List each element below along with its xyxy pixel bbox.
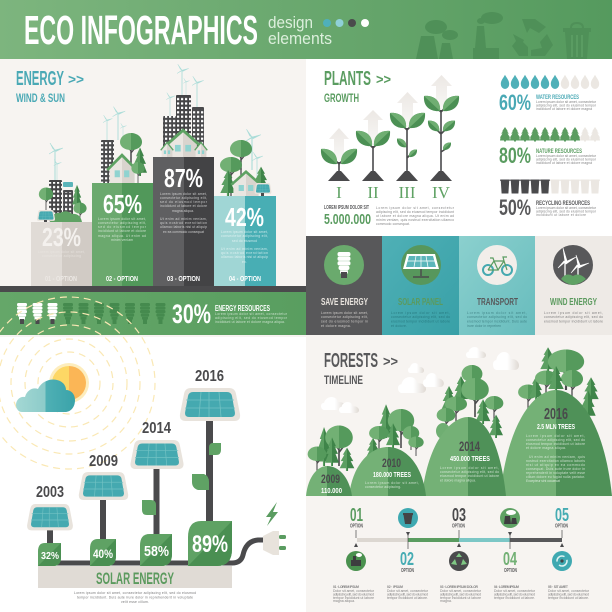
chart: forest trees 2014	[436, 365, 503, 439]
stage numerals: III	[399, 183, 416, 202]
stat: 5.000.000: 5.000.000	[324, 211, 371, 228]
bar: 02 option: 02 - OPTION	[106, 274, 138, 283]
stat: water resources 60%: 60%	[499, 90, 531, 115]
option 05: 05	[555, 505, 569, 525]
leaf: 58%	[140, 534, 172, 566]
hill: 2010: Lorem ipsum dolor sit amet,	[365, 481, 419, 485]
chart: solar energy growth	[27, 368, 286, 604]
hill: 2010: consectetur adipiscing.	[365, 485, 401, 489]
panel: save energy tile: sed do eiusmod tempor in	[321, 320, 368, 324]
hill: 2016: reprehenderit in voluptate velit esse	[526, 471, 585, 475]
text: solar caption: Lorem ipsum dolor sit amet, consectetur adipiscing elit, sed do eiusmod	[74, 591, 196, 595]
icon: cloud	[16, 379, 75, 412]
solar panels	[27, 388, 240, 530]
text: timeline descriptions: adipiscing elit, sed do eiusmod	[440, 592, 481, 596]
stat: 5.000.000: Lorem ipsum dolor sit amet, consectetur	[376, 206, 455, 210]
text: solar caption	[74, 591, 196, 604]
leaf: 32%	[38, 543, 61, 566]
text: energy resources: ENERGY RESOURCES	[215, 304, 270, 313]
stat: water resources 60%: WATER RESOURCES	[536, 95, 579, 101]
leaves	[321, 96, 459, 164]
icon: factory	[473, 12, 503, 59]
stage numerals: IV	[432, 183, 451, 202]
text: solar caption: velit esse cillum.	[121, 600, 149, 604]
option 03	[449, 505, 469, 571]
panel: energy background	[0, 59, 306, 337]
stat: 5.000.000: adipiscing elit, sed do eiusmod tempor incididunt	[376, 210, 454, 214]
icon: trash bin	[563, 23, 591, 59]
option 01: OPTION	[350, 524, 363, 530]
hill: 2010: 2010	[382, 456, 401, 470]
hill: 2014: 450.000 TREES	[450, 454, 490, 463]
hill: 2010: 180.000 TREES	[373, 472, 411, 479]
hill: 2009	[306, 466, 352, 496]
chart: forest trees 2009	[308, 426, 354, 472]
stat: 5.000.000: ut labore et dolore magna aliqua. Ut enim ad	[376, 214, 454, 218]
bar: 04 option: 04 - OPTION	[229, 274, 261, 283]
option 04: 04	[503, 549, 517, 569]
text: timeline descriptions: 04 · LOREM IPSUM	[494, 585, 519, 589]
leaf: 89%	[188, 521, 232, 566]
bar: 02 option: consectetur adipiscing elit,	[98, 221, 146, 225]
year labels: 2014	[142, 420, 171, 437]
bar: 04 option: 42%	[225, 202, 264, 232]
text: timeline descriptions: adipiscing elit, sed do eiusmod	[494, 592, 535, 596]
panel: save energy tile: consectetur adipiscing elit,	[321, 315, 368, 319]
bar: 02 option: minim veniam	[111, 238, 133, 242]
chart: forest trees 2010	[366, 404, 424, 460]
icon row: light bulbs	[17, 303, 166, 324]
subtitle: design	[268, 13, 313, 32]
cable	[40, 540, 266, 563]
panel: transport tile	[459, 236, 535, 335]
hill: 2016	[500, 390, 612, 496]
base label: solar energy	[38, 566, 232, 588]
stat: nature resources 80%	[499, 127, 600, 168]
option 01	[346, 505, 366, 571]
text: energy resources	[215, 304, 288, 324]
text: timeline descriptions: tempor incididunt ut labore.	[494, 596, 535, 600]
bar: 03 option: quis nostrud exercitation	[160, 221, 207, 225]
bar: 01 option: consectetur adipiscing	[42, 254, 81, 258]
text: energy resources: incididunt ut labore et dolore magna aliqua.	[215, 320, 285, 324]
option 04	[500, 508, 520, 574]
stat: 5.000.000: commodo consequat.	[376, 222, 410, 226]
panel: save energy tile: SAVE ENERGY	[321, 297, 368, 308]
panel: transport tile: TRANSPORT	[477, 297, 518, 308]
leaf: 40%: 40%	[93, 547, 113, 561]
year labels: 2003	[36, 484, 64, 501]
stat: 5.000.000	[324, 205, 455, 228]
bar: 04 option: Lorem ipsum dolor sit amet,	[221, 230, 268, 234]
panel: wind energy tile: eiusmod tempor incididunt ut labore	[544, 320, 603, 324]
colour dots	[323, 19, 369, 27]
bar: 02 option: sed do eiusmod tempor	[98, 225, 147, 229]
text: energy resources: Lorem ipsum dolor sit amet, consectetur	[215, 312, 288, 316]
solar stems	[47, 420, 213, 547]
panel: transport tile: consectetur adipiscing elit, sed do	[467, 315, 527, 319]
stage numerals	[336, 183, 451, 202]
bar: 04 option: sed do eiusmod	[232, 239, 257, 243]
header banner	[0, 0, 612, 59]
panel: transport tile: irure dolor in reprehen	[467, 324, 501, 328]
hill: 2016: Ut enim ad minim veniam, quis	[529, 455, 585, 459]
panel: solar panel tile: eiusmod tempor incididunt ut labore	[391, 320, 450, 324]
bar: 03 option: Ut enim ad minim veniam,	[160, 217, 207, 221]
chart: option timeline	[346, 505, 572, 574]
hill: 2016: eiusmod tempor incididunt ut labore	[526, 442, 585, 446]
text: timeline descriptions: 05 · SIT AMET	[548, 585, 569, 589]
stat: 30%: 30%	[172, 299, 211, 329]
panel: solar panel tile	[382, 236, 459, 335]
bar: 04 option: consectetur adipiscing elit,	[221, 234, 268, 238]
chart: plant growth stages	[321, 75, 459, 202]
panel: transport tile: eiusmod tempor incididunt. Duis aute	[467, 320, 527, 324]
panel: plants heading: GROWTH	[324, 91, 359, 105]
bar: 04 option: Ut enim ad minim veniam,	[221, 247, 268, 251]
subtitle	[268, 13, 332, 48]
panel: forests heading: FORESTS	[324, 350, 378, 372]
stat: water resources 60%: adipiscing elit, sed do eiusmod tempor	[536, 104, 597, 108]
hill: 2016: 2.5 MLN TREES	[537, 422, 575, 431]
option 03: OPTION	[452, 524, 465, 530]
panel: energy heading: WIND & SUN	[16, 91, 65, 105]
text: timeline descriptions: 03 · LOREM IPSUM DOLOR	[440, 585, 479, 589]
illustration: city on bar 2	[101, 107, 147, 183]
bar: 03 option: ullamco laboris nisi ut aliquip	[160, 225, 207, 229]
timeline bar	[357, 538, 562, 542]
text: timeline descriptions: Dolor sit amet, consectetur	[387, 589, 429, 593]
option 01: 01	[350, 505, 363, 525]
hill: 2016: et dolore magna aliqua.	[526, 446, 566, 450]
stage numerals: II	[367, 183, 379, 202]
hill: 2014: eiusmod tempor incididunt ut labore	[440, 474, 499, 478]
panel: solar panel tile: et dolore.	[391, 324, 407, 328]
stat: recycling resources 50%	[499, 180, 600, 220]
bar: 04 option: quis nostrud exercitation	[221, 251, 268, 255]
bar: 02 option: magna aliqua. Ut enim ad	[98, 234, 146, 238]
icon: cooling towers	[416, 20, 458, 59]
panel: energy heading: >>	[68, 71, 84, 87]
text: timeline descriptions: magna.	[440, 599, 452, 603]
text: timeline descriptions: adipiscing elit, sed do eiusmod	[333, 592, 374, 596]
bar: 03 option: magna aliqua.	[172, 209, 194, 213]
panel: plants heading	[324, 68, 391, 105]
stat: 5.000.000: LOREM IPSUM DOLOR SIT	[324, 205, 369, 211]
hill: 2009: 110.000	[321, 486, 342, 495]
text: timeline descriptions: tempor incididunt ut labore.	[548, 596, 589, 600]
hill: 2014	[422, 417, 506, 496]
bar: 02 option: incididunt ut labore et dolore	[98, 229, 146, 233]
baseline bar	[0, 286, 306, 292]
panel: save energy tile: et dolore magna.	[321, 324, 351, 328]
text: timeline descriptions: Dolor sit amet, consectetur	[440, 589, 482, 593]
option 05	[552, 505, 572, 571]
hill: 2016: nisi ut aliquip ex ea commodo	[526, 463, 585, 467]
panel: plants heading: >>	[376, 71, 391, 87]
stat: 5.000.000: minim veniam, quis nostrud exercitation ullamco	[376, 218, 454, 222]
stat: recycling resources 50%: 50%	[499, 195, 531, 220]
panel: transport tile: Lorem ipsum dolor sit amet,	[467, 311, 527, 315]
option 04: OPTION	[504, 568, 517, 574]
panel: save energy tile	[306, 236, 382, 335]
illustration: sun rays rings	[0, 297, 155, 469]
text: energy resources: adipiscing elit, sed do eiusmod tempor	[215, 316, 288, 320]
text: timeline descriptions: Dolor sit amet, consectetur	[333, 589, 375, 593]
hill: 2014: 2014	[459, 438, 480, 454]
stat: nature resources 80%: 80%	[499, 143, 531, 168]
text: timeline descriptions: Dolor sit amet, consectetur	[548, 589, 590, 593]
text: timeline descriptions: Dolor sit amet, consectetur	[494, 589, 536, 593]
stat: water resources 60%	[499, 75, 599, 115]
text: timeline descriptions: tempor incididunt ut labore	[440, 596, 481, 600]
bar: 02 option	[92, 183, 153, 286]
option 02: 02	[400, 549, 414, 569]
bar: 03 option	[153, 157, 214, 286]
panel: forests heading: >>	[383, 353, 398, 369]
bar: 04 option	[214, 196, 276, 286]
stems	[335, 108, 447, 172]
bar: 01 option: 01 - OPTION	[45, 274, 77, 283]
subtitle: elements	[268, 29, 332, 48]
panel: solar panel tile: consectetur adipiscing elit, sed do	[391, 315, 450, 319]
stat: water resources 60%: incididunt ut labore et dolore magna	[536, 107, 592, 111]
icon: sun	[49, 363, 89, 403]
panel: solar panel tile: SOLAR PANEL	[398, 297, 443, 308]
pot bases	[328, 171, 452, 181]
panel: forests heading: TIMELINE	[324, 373, 363, 387]
panel: solar background	[0, 337, 306, 612]
hill: 2016: 2016	[544, 406, 568, 423]
clouds	[321, 347, 519, 413]
text: solar caption: tempor incididunt. Duis aute irure dolor in reprehenderit in voluptate	[77, 596, 193, 600]
option 05: OPTION	[555, 524, 568, 530]
icon: plug	[263, 531, 286, 555]
stat: nature resources 80%: NATURE RESOURCES	[536, 149, 582, 155]
bar: 03 option: 87%	[164, 163, 203, 193]
stat: water resources 60%: Lorem ipsum dolor sit amet, consectetur	[536, 100, 597, 104]
stat: recycling resources 50%: RECYCLING RESOURCES	[536, 201, 590, 207]
hill: 2016: cillum dolore eu fugiat nulla pariatur.	[526, 475, 585, 479]
panel: plants heading: PLANTS	[324, 68, 371, 90]
leaf: 89%: 89%	[192, 531, 228, 558]
illustration: city on bar 4	[220, 129, 271, 196]
panel: save energy tile: Lorem ipsum dolor sit amet,	[321, 311, 368, 315]
panel: wind energy tile: Lorem ipsum dolor sit amet,	[544, 311, 603, 315]
chart: forest trees 2016	[518, 347, 599, 419]
leaf: 40%	[90, 539, 116, 566]
growth arrows	[329, 75, 452, 162]
hill: 2010	[349, 447, 426, 496]
option 02: OPTION	[401, 568, 414, 574]
bar: 01 option: 23%	[42, 222, 81, 252]
bar: 01 option	[31, 222, 92, 286]
text: timeline descriptions: adipiscing elit, sed do eiusmod	[548, 592, 589, 596]
bar: 04 option: ex.	[242, 260, 247, 264]
hill: 2016: consectetur adipiscing elit, sed do	[526, 438, 585, 442]
leaf: 32%: 32%	[41, 551, 59, 562]
panel: energy heading	[16, 68, 84, 105]
panel: forests heading	[324, 350, 398, 387]
panel: wind energy tile	[535, 236, 612, 335]
year labels: 2009	[89, 453, 118, 470]
illustration: city on bar 3	[160, 64, 208, 157]
text: timeline descriptions	[333, 585, 590, 603]
text: timeline descriptions: 02 · IPSUM	[387, 585, 403, 589]
stem leaves	[142, 443, 221, 515]
bar: 03 option: sed do eiusmod tempor	[160, 200, 208, 204]
bar chart: energy options	[31, 157, 276, 286]
bar: 01 option: Lorem ipsum dolor sit amet,	[38, 250, 85, 254]
bar: 03 option: incididunt ut labore et dolore	[160, 204, 207, 208]
hill: 2014: consectetur adipiscing elit, sed do	[440, 470, 499, 474]
option 03: 03	[452, 505, 466, 525]
hill: 2014: Lorem ipsum dolor sit amet,	[440, 466, 499, 470]
stat: recycling resources 50%: Lorem ipsum dolor sit amet, consectetur	[536, 206, 597, 210]
stat: nature resources 80%: adipiscing elit, sed do eiusmod tempor	[536, 158, 597, 162]
bar: 02 option: 65%	[103, 189, 142, 219]
year labels	[36, 368, 224, 501]
bar: 03 option: Lorem ipsum dolor sit amet,	[160, 192, 207, 196]
panel: solar panel tile: Lorem ipsum dolor sit amet,	[391, 311, 450, 315]
text: timeline descriptions: tempor incididunt ut labore.	[387, 596, 428, 600]
hill: 2014: et dolore magna aliqua.	[440, 478, 476, 482]
panel: wind energy tile: consectetur adipiscing elit, sed do	[544, 315, 603, 319]
hill: 2016: consequat. Duis aute irure dolor in	[526, 467, 585, 471]
text: timeline descriptions: 01 · LOREM IPSUM	[333, 585, 359, 589]
stat: nature resources 80%: Lorem ipsum dolor sit amet, consectetur	[536, 154, 597, 158]
text: timeline descriptions: magna aliqua.	[333, 599, 355, 603]
hill: 2016: Excepteur sint occaecat	[526, 479, 560, 483]
stat: recycling resources 50%: incididunt ut labore et dolore	[536, 213, 586, 217]
bar: 04 option: ullamco laboris nisi ut aliquip	[221, 255, 268, 259]
icon: lightning bolt	[266, 502, 278, 526]
panel: forests background	[306, 335, 612, 612]
bar: 03 option: 03 - OPTION	[167, 274, 200, 283]
icon: recycle	[512, 19, 553, 56]
hill: 2009: 2009	[321, 472, 340, 486]
stat: nature resources 80%: incididunt ut labore et dolore magna	[536, 161, 592, 165]
stat: recycling resources 50%: adipiscing elit, sed do eiusmod tempor	[536, 210, 597, 214]
bar: 02 option: Lorem ipsum dolor sit amet,	[98, 217, 146, 221]
hill: 2016: nostrud exercitation ullamco laboris	[526, 459, 585, 463]
year labels: 2016	[195, 368, 224, 385]
bar: 03 option: consectetur adipiscing elit,	[160, 196, 207, 200]
option 02	[398, 508, 418, 574]
illustration: city on bar 1	[37, 143, 87, 222]
panel: plants background	[306, 59, 612, 236]
panel: energy heading: ENERGY	[16, 68, 64, 90]
hill: 2016: Lorem ipsum dolor sit amet,	[526, 434, 585, 438]
bar: 03 option: ex ea commodo consequat	[163, 230, 204, 234]
panel: energy resources band	[0, 292, 306, 335]
text: timeline descriptions: tempor incididunt ut labore	[333, 596, 374, 600]
base label: solar energy: SOLAR ENERGY	[96, 569, 174, 588]
stage numerals: I	[336, 183, 342, 202]
leaf: 58%: 58%	[144, 543, 169, 560]
timeline ticks	[356, 530, 562, 549]
title: ECO INFOGRAPHICS	[24, 7, 258, 53]
text: timeline descriptions: adipiscing elit, sed do eiusmod	[387, 592, 428, 596]
